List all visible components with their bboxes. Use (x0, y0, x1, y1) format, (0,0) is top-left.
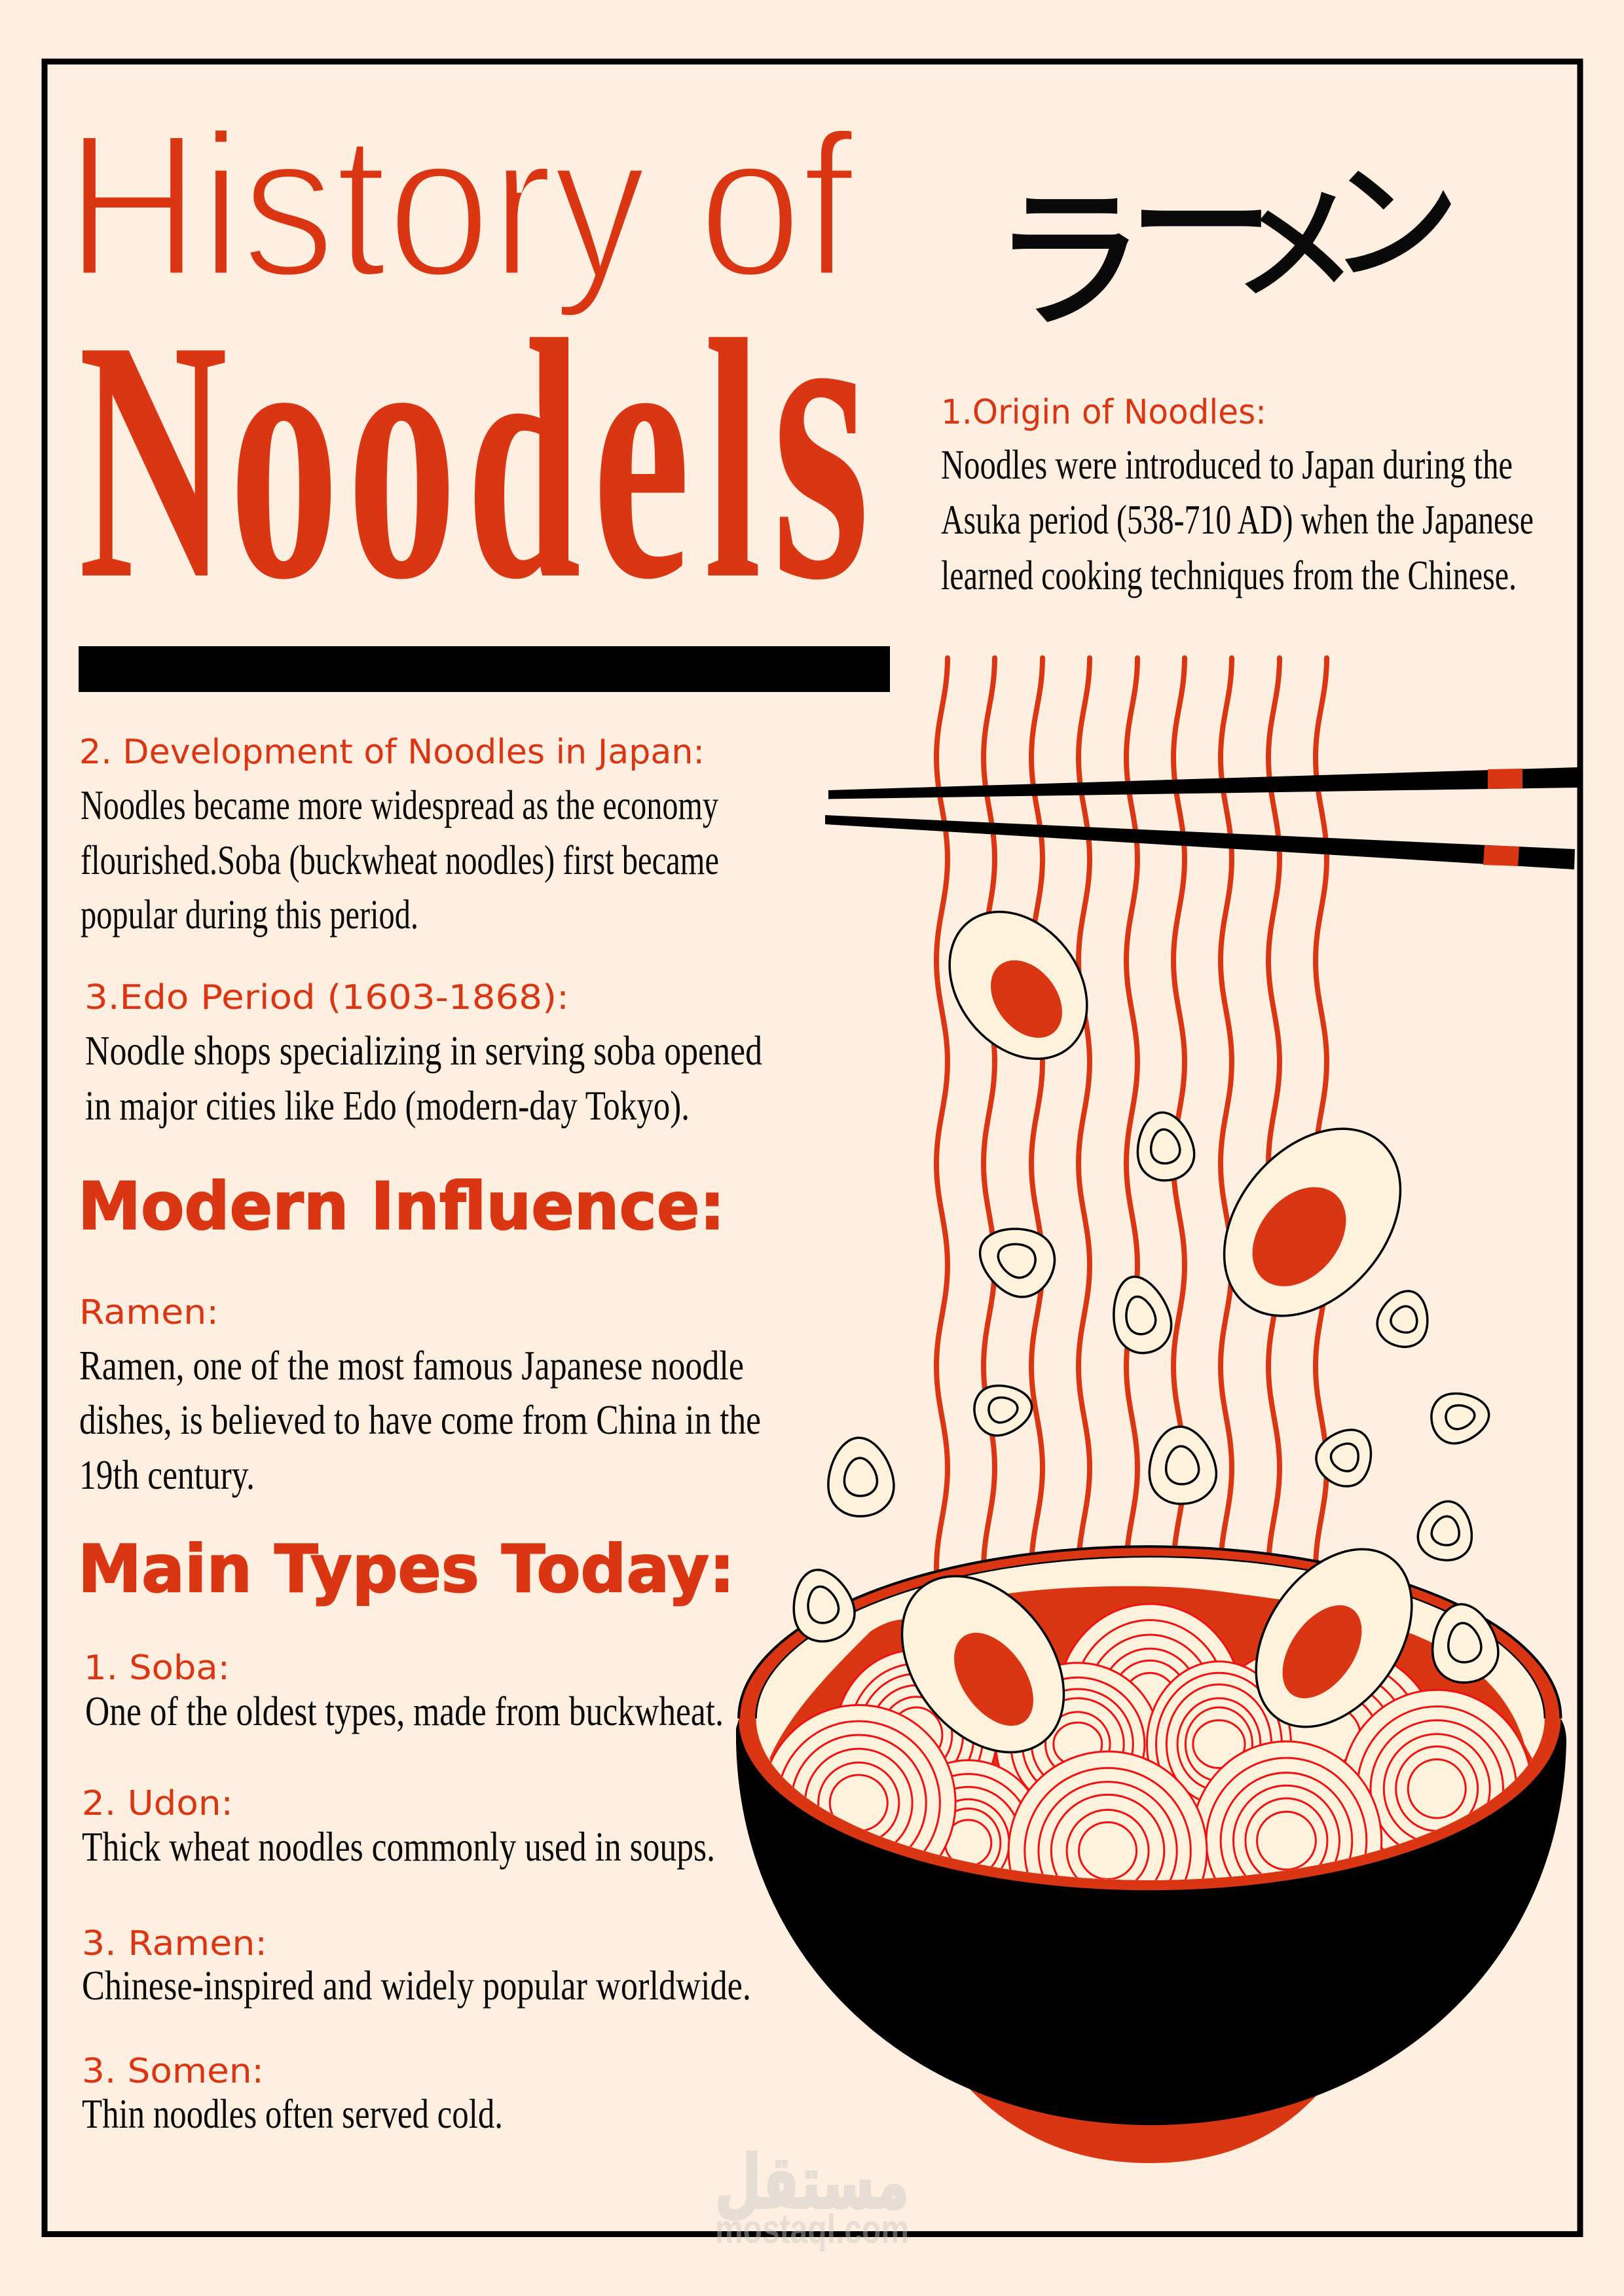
type: udon: 2. Udon: (82, 1784, 233, 1823)
bowl body (736, 1715, 1566, 2125)
body: ramen (79, 1342, 761, 1498)
body: ramen: 19th century. (79, 1451, 255, 1498)
type: ramen (82, 1924, 751, 2009)
ramen bowl (736, 1546, 1566, 2163)
eggs on the bowl (784, 1520, 1502, 1783)
heading: ramen: Ramen: (79, 1293, 219, 1332)
body: origin (941, 441, 1534, 598)
watermark (715, 2140, 909, 2252)
type: ramen: 3. Ramen: (82, 1924, 267, 1963)
section: Edo period (84, 978, 762, 1129)
body: Edo: in major cities like Edo (modern-day Tokyo). (85, 1082, 690, 1129)
chopsticks (825, 767, 1578, 869)
section: ramen (79, 1293, 761, 1498)
floating eggs (825, 884, 1493, 1564)
watermark: مستقل (715, 2140, 909, 2225)
body: Edo (85, 1027, 762, 1129)
rim outline (739, 1546, 1560, 1719)
type: udon (82, 1784, 715, 1870)
noodle coils (770, 1603, 1530, 1880)
large egg right (1189, 1095, 1436, 1350)
broth (769, 1586, 1533, 1887)
body: ramen: Ramen, one of the most famous Japanese noodle (79, 1342, 744, 1389)
type: ramen: Chinese-inspired and widely popular worldwide. (82, 1962, 751, 2009)
watermark: mostaql.com (715, 2207, 909, 2252)
inner rim line (756, 1557, 1545, 1719)
title: Noodels: d (466, 269, 581, 650)
heading: main types today: Main Types Today: (78, 1531, 735, 1607)
rim (739, 1546, 1560, 1890)
title: Noodels: o (347, 249, 457, 655)
title: Noodels: s (772, 203, 870, 666)
halved egg left (869, 1545, 1097, 1783)
heading: modern influence: Modern Influence: (78, 1168, 725, 1245)
heading: origin: 1.Origin of Noodles: (941, 393, 1266, 432)
katakana title: ramen: ン (1329, 117, 1460, 306)
title: Noodels: l (704, 269, 762, 650)
title: Noodels: o (229, 249, 339, 655)
large egg upper left (921, 884, 1115, 1086)
type: somen: 3. Somen: (82, 2052, 264, 2091)
section: origin of noodles (941, 393, 1534, 598)
body: development: flourished.Soba (buckwheat noodles) first became (81, 837, 719, 883)
heading: development: 2. Development of Noodles in Japan: (79, 733, 705, 772)
type: somen (82, 2052, 503, 2137)
broth and noodles (769, 1586, 1532, 1880)
katakana title: ramen: ー (1128, 104, 1275, 318)
katakana title: ramen: ラ (992, 136, 1146, 359)
body: development (81, 782, 719, 938)
type: soba: One of the oldest types, made from buckwheat. (85, 1688, 724, 1734)
type: somen: Thin noodles often served cold. (82, 2090, 503, 2137)
bowl inside (756, 1557, 1545, 1880)
halved egg right (1224, 1520, 1444, 1756)
small egg slices (825, 1109, 1493, 1564)
type: soba: 1. Soba: (84, 1649, 230, 1688)
type: udon: Thick wheat noodles commonly used in soups. (82, 1823, 715, 1870)
small egg right of rim (1426, 1600, 1502, 1686)
type: soba (84, 1649, 724, 1734)
body: Edo: Noodle shops specializing in serving soba opened (85, 1027, 762, 1074)
body: development: Noodles became more widespread as the economy (81, 782, 718, 828)
bowl foot (969, 2088, 1323, 2163)
title: Noodels: e (593, 249, 690, 655)
body: development: popular during this period. (81, 891, 418, 938)
bowl interior in source coordinates (737, 1545, 1562, 1891)
body: ramen: dishes, is believed to have come from China in the (79, 1396, 761, 1443)
small egg left of rim (784, 1563, 860, 1647)
black title bar (79, 646, 890, 692)
heading: Edo: 3.Edo Period (1603-1868): (84, 978, 569, 1017)
noodle strands (936, 658, 1327, 1569)
title: History of: History of (65, 92, 855, 320)
title: Noodels: N (79, 269, 227, 650)
section: development in Japan (79, 733, 719, 938)
katakana title: ramen: メ (1233, 144, 1357, 324)
